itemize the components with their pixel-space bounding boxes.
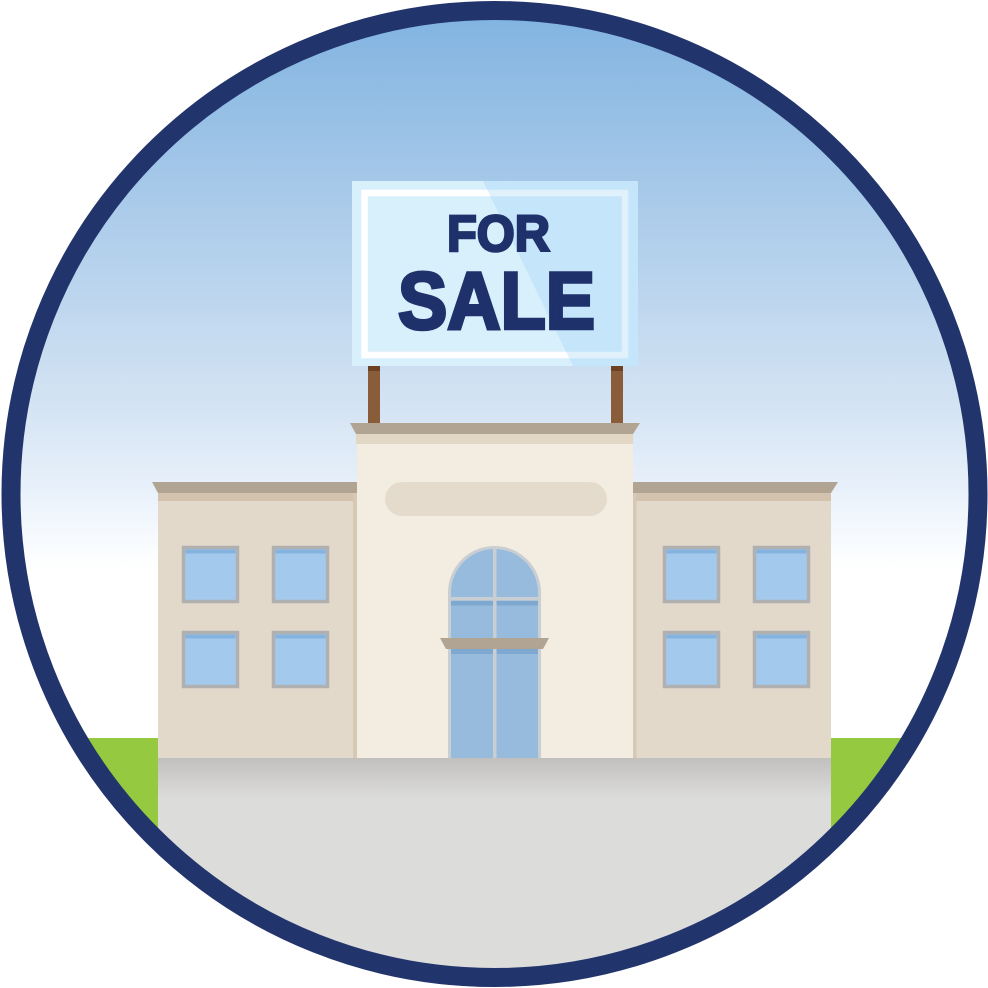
grass	[88, 738, 901, 828]
sign glare	[483, 181, 638, 366]
right windows	[664, 548, 808, 686]
arched door	[440, 546, 549, 758]
door awning	[440, 638, 549, 649]
sign text: sale: SALE	[398, 256, 595, 346]
for sale sign	[352, 181, 638, 366]
central tower	[350, 423, 640, 758]
sky	[20, 20, 968, 538]
left wing	[152, 482, 357, 758]
sign text: for: FOR	[447, 205, 550, 262]
pavement	[158, 758, 831, 988]
name plaque	[385, 482, 607, 516]
sign posts	[368, 366, 623, 424]
right wing	[633, 482, 838, 758]
left windows	[184, 548, 328, 686]
